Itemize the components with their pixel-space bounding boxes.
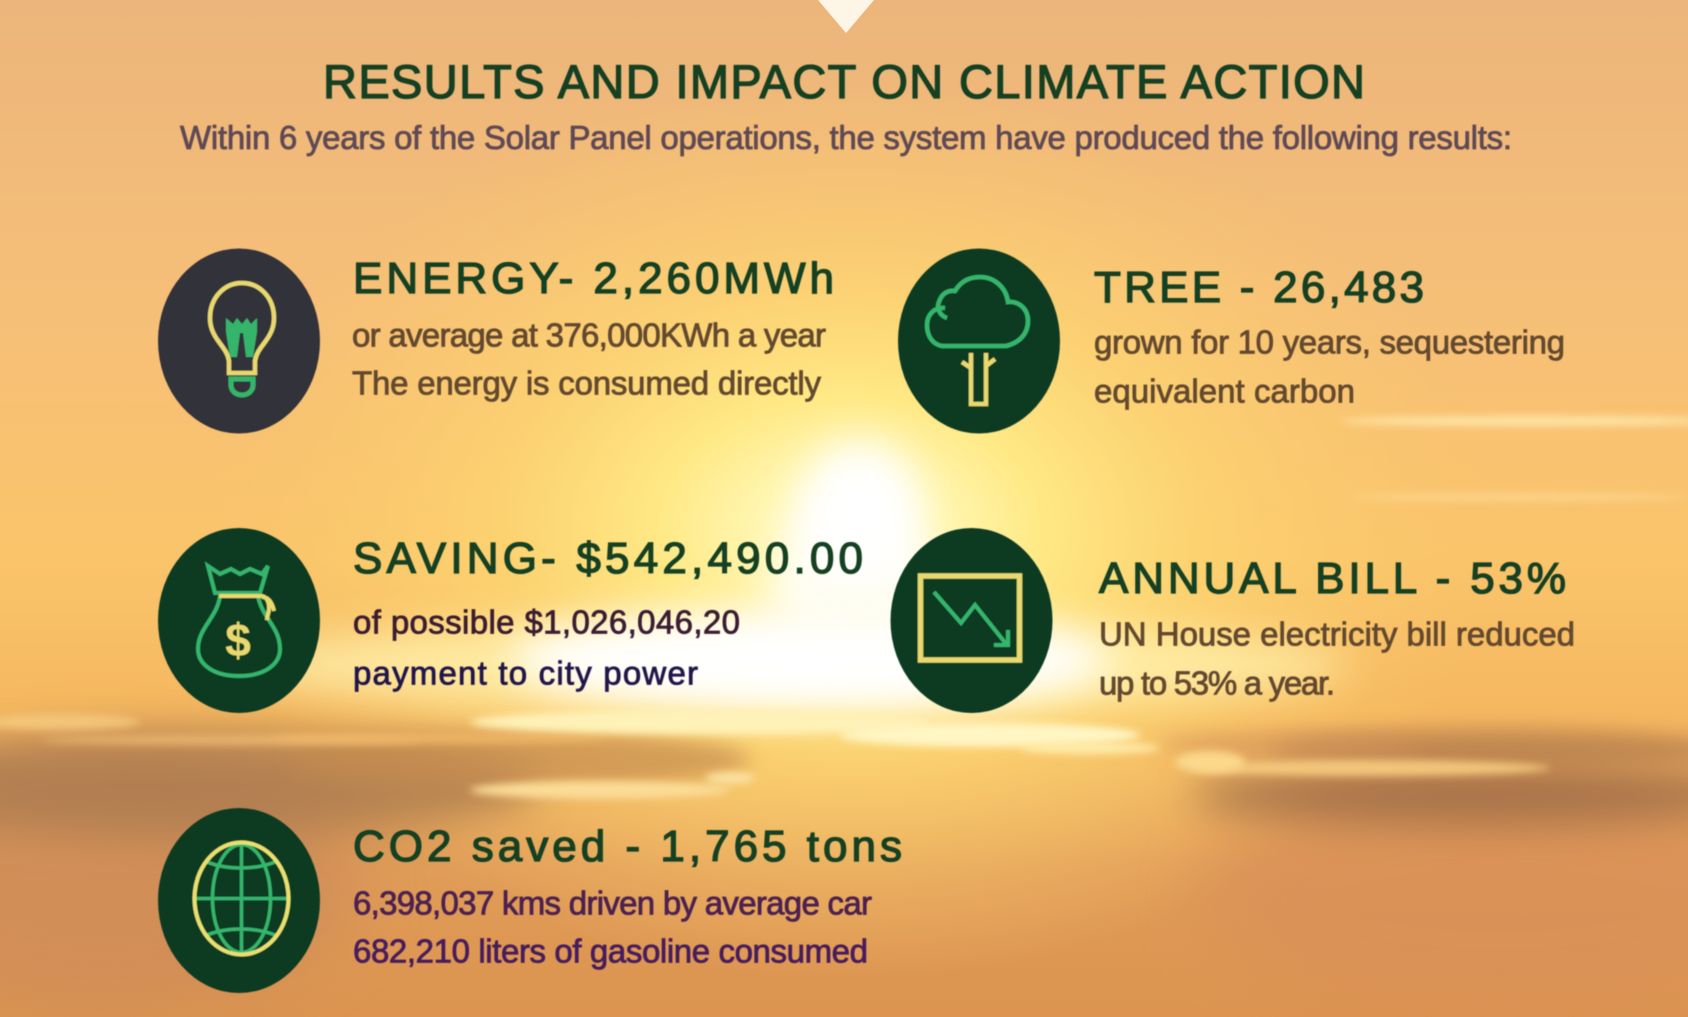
- heading: co2 saved: CO2 saved - 1,765 tons: [353, 822, 902, 871]
- text: co2 detail: 6,398,037 kms driven by average car: [353, 884, 872, 922]
- item: saving: [158, 528, 863, 713]
- item: co2 saved: [158, 808, 902, 993]
- icon: globe: [158, 808, 320, 993]
- text: saving detail: of possible $1,026,046,20: [353, 604, 740, 640]
- item: annual bill: [890, 528, 1575, 713]
- heading: annual bill: ANNUAL BILL - 53%: [1099, 554, 1566, 603]
- text: co2 detail: [353, 884, 872, 970]
- dollar sign: $: [225, 614, 251, 666]
- heading: energy: ENERGY- 2,260MWh: [353, 254, 834, 303]
- text: energy detail: [352, 316, 826, 402]
- clouds: left bank: [0, 710, 930, 837]
- text: energy detail: or average at 376,000KWh a year: [352, 316, 826, 354]
- heading: tree: TREE - 26,483: [1094, 263, 1424, 312]
- light streaks: [1340, 416, 1688, 501]
- text: saving detail: [353, 604, 740, 692]
- text: tree detail: grown for 10 years, sequestering: [1094, 324, 1565, 360]
- title: RESULTS AND IMPACT ON CLIMATE ACTION: [323, 55, 1365, 108]
- subtitle: Within 6 years of the Solar Panel operations, the system have produced the following results:: [180, 119, 1512, 156]
- item: tree: [898, 248, 1565, 434]
- icon: tree: [898, 248, 1060, 434]
- text: co2 detail: 682,210 liters of gasoline consumed: [353, 932, 868, 970]
- text: annual bill detail: UN House electricity bill reduced: [1099, 616, 1575, 652]
- text: energy detail: The energy is consumed directly: [352, 364, 822, 402]
- text: annual bill detail: up to 53% a year.: [1099, 664, 1335, 702]
- text: annual bill detail: [1099, 616, 1575, 702]
- icon: light bulb: [158, 248, 320, 434]
- icon: money bag: [158, 528, 320, 713]
- text: tree detail: equivalent carbon: [1094, 372, 1355, 410]
- clouds: right bank: [840, 723, 1688, 825]
- icon: declining chart: [890, 528, 1052, 713]
- item: energy: [158, 248, 834, 434]
- text: saving detail: payment to city power: [353, 654, 698, 692]
- text: tree detail: [1094, 324, 1565, 410]
- heading: saving: SAVING- $542,490.00: [353, 534, 863, 583]
- pointer: white diamond tip: [818, 0, 874, 33]
